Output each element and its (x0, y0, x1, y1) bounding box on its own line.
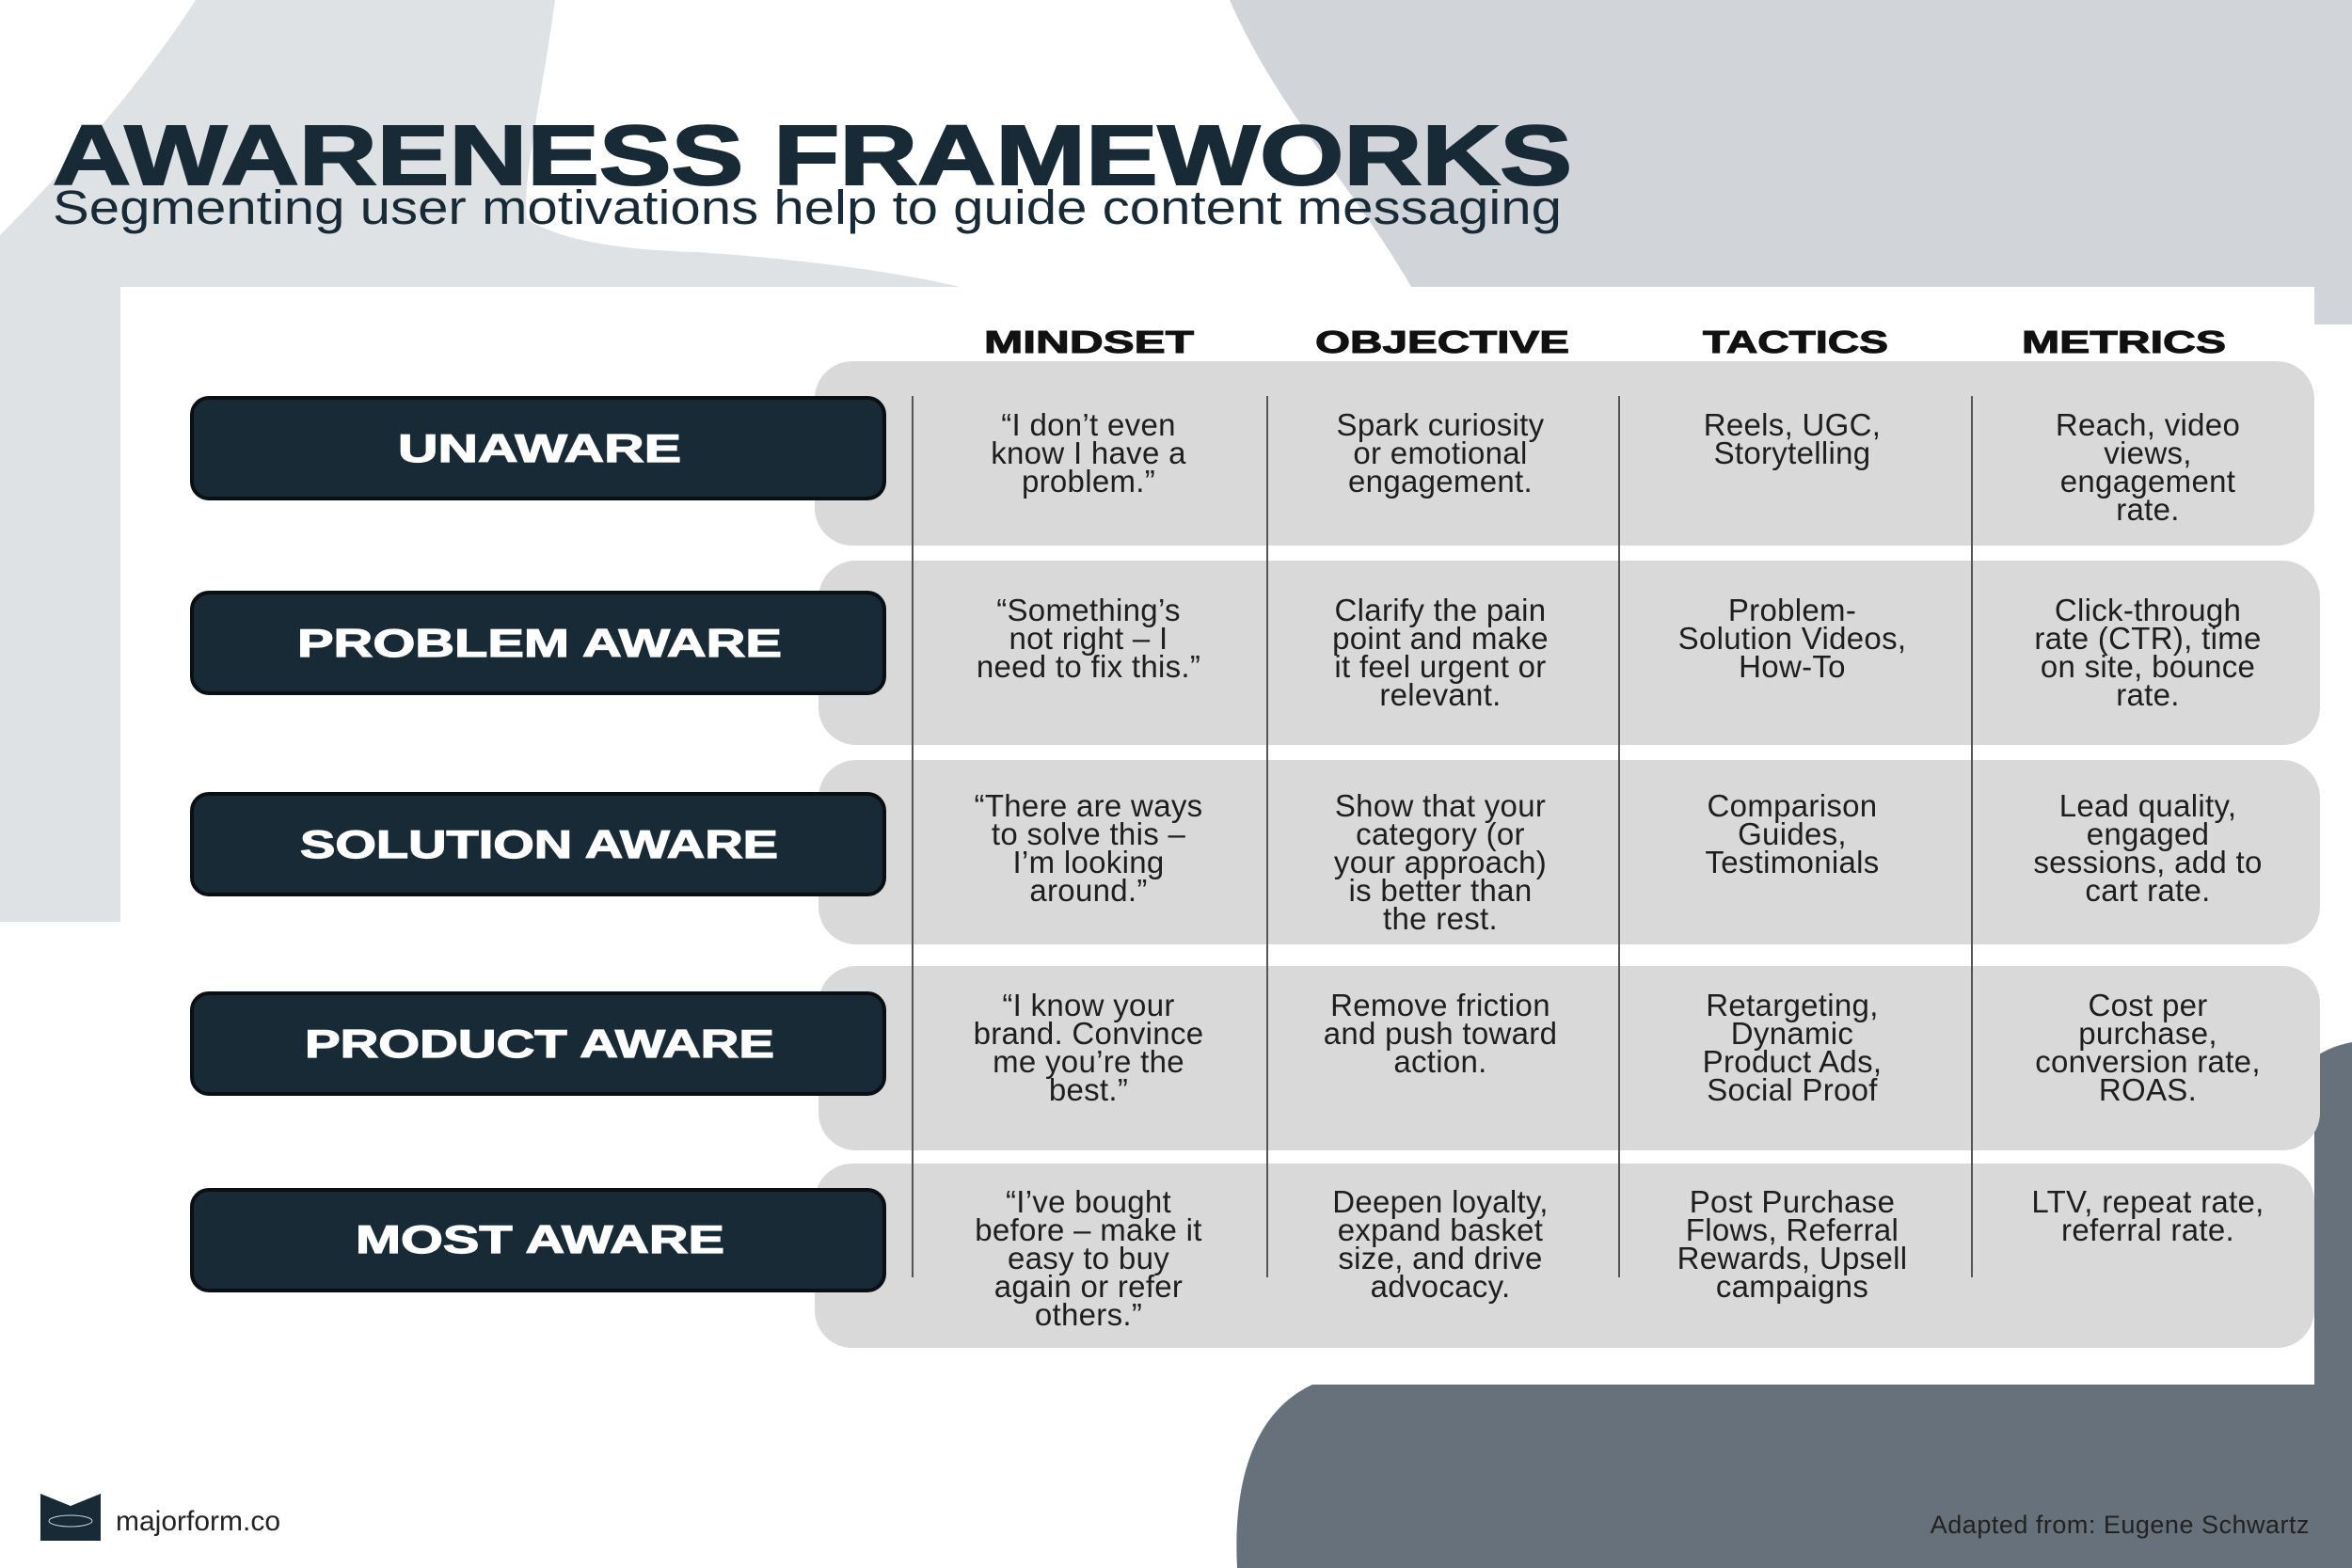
text: brand. Convince (974, 1016, 1203, 1051)
text: Remove friction (1330, 988, 1550, 1022)
text: Cost per (2088, 988, 2208, 1022)
text: “I know your (1002, 988, 1175, 1022)
text: not right – I (1009, 621, 1168, 656)
row 3 cells (975, 788, 2263, 936)
text: Storytelling (1714, 436, 1870, 470)
text: need to fix this.” (977, 649, 1200, 684)
row 1 cells (991, 407, 2240, 527)
label: product aware (190, 991, 886, 1096)
text: “I’ve bought (1006, 1184, 1171, 1219)
text: I’m looking (1012, 845, 1165, 879)
text: Testimonials (1705, 845, 1880, 879)
text: Guides, (1738, 816, 1847, 851)
text: Reels, UGC, (1704, 407, 1881, 442)
column headers: MINDSET (984, 325, 1194, 359)
column headers (984, 325, 2226, 359)
label texts: UNAWARE (398, 426, 681, 470)
text: best.” (1049, 1072, 1128, 1107)
text: conversion rate, (2035, 1044, 2261, 1079)
label texts: SOLUTION AWARE (300, 822, 778, 866)
icon: majorform logo (40, 1494, 101, 1541)
text: Lead quality, (2059, 788, 2236, 823)
text: Spark curiosity (1337, 407, 1544, 442)
text: Dynamic (1731, 1016, 1853, 1051)
text: size, and drive (1338, 1241, 1543, 1275)
text: Social Proof (1707, 1072, 1878, 1107)
text: me you’re the (993, 1044, 1184, 1079)
text: “Something’s (996, 593, 1181, 627)
row backgrounds (815, 361, 2320, 1348)
text: rate. (2116, 677, 2180, 712)
label: unaware (190, 396, 886, 500)
text: Show that your (1335, 788, 1546, 823)
text: engaged (2087, 816, 2209, 851)
text: Clarify the pain (1335, 593, 1546, 627)
text: rate. (2116, 492, 2180, 527)
text: or emotional (1353, 436, 1528, 470)
text: ROAS. (2099, 1072, 2197, 1107)
text: engagement. (1348, 464, 1533, 499)
label: most aware (190, 1188, 886, 1292)
text: Retargeting, (1706, 988, 1879, 1022)
text: Problem- (1728, 593, 1856, 627)
text: before – make it (975, 1212, 1202, 1247)
label texts: MOST AWARE (356, 1217, 724, 1261)
text: easy to buy (1008, 1241, 1169, 1275)
text: rate (CTR), time (2034, 621, 2262, 656)
text: expand basket (1338, 1212, 1543, 1247)
text: cart rate. (2085, 873, 2211, 908)
text: engagement (2060, 464, 2235, 499)
text: point and make (1332, 621, 1549, 656)
text: Product Ads, (1703, 1044, 1882, 1079)
text: around.” (1029, 873, 1148, 908)
row 2 cells (977, 593, 2262, 712)
text: campaigns (1716, 1269, 1868, 1304)
row 5 cells (975, 1184, 2265, 1332)
title: AWARENESS FRAMEWORKS (53, 109, 1572, 203)
label texts: PROBLEM AWARE (297, 621, 782, 665)
text: Post Purchase (1690, 1184, 1895, 1219)
source credit: Adapted from: Eugene Schwartz (1931, 1511, 2310, 1539)
label: solution aware (190, 792, 886, 896)
text: views, (2104, 436, 2192, 470)
label: problem aware (190, 591, 886, 695)
text: Deepen loyalty, (1332, 1184, 1549, 1219)
text: it feel urgent or (1334, 649, 1547, 684)
text: sessions, add to (2033, 845, 2263, 879)
text: Flows, Referral (1686, 1212, 1899, 1247)
text: purchase, (2078, 1016, 2217, 1051)
subtitle: Segmenting user motivations help to guide content messaging (53, 181, 1562, 234)
text: LTV, repeat rate, (2031, 1184, 2265, 1219)
text: “There are ways (975, 788, 1202, 823)
text: others.” (1035, 1297, 1142, 1332)
label texts: PRODUCT AWARE (305, 1022, 774, 1066)
text: advocacy. (1371, 1269, 1510, 1304)
text: your approach) (1334, 845, 1547, 879)
text: Solution Videos, (1678, 621, 1906, 656)
column headers: OBJECTIVE (1315, 325, 1569, 359)
text: know I have a (991, 436, 1186, 470)
text: Comparison (1708, 788, 1877, 823)
text: again or refer (994, 1269, 1183, 1304)
row 4 cells (974, 988, 2261, 1107)
text: How-To (1739, 649, 1846, 684)
text: Rewards, Upsell (1677, 1241, 1907, 1275)
text: action. (1393, 1044, 1487, 1079)
white panel (120, 287, 2314, 1385)
text: problem.” (1022, 464, 1155, 499)
text: and push toward (1324, 1016, 1557, 1051)
column headers: METRICS (2022, 325, 2226, 359)
text: category (or (1356, 816, 1525, 851)
text: the rest. (1383, 901, 1498, 936)
text: Click-through (2055, 593, 2241, 627)
brand text: majorform.co (116, 1506, 280, 1537)
text: to solve this – (992, 816, 1185, 851)
text: Reach, video (2056, 407, 2240, 442)
column headers: TACTICS (1703, 325, 1888, 359)
text: is better than (1349, 873, 1532, 908)
text: relevant. (1379, 677, 1502, 712)
text: on site, bounce (2041, 649, 2255, 684)
text: “I don’t even (1001, 407, 1176, 442)
text: referral rate. (2061, 1212, 2234, 1247)
